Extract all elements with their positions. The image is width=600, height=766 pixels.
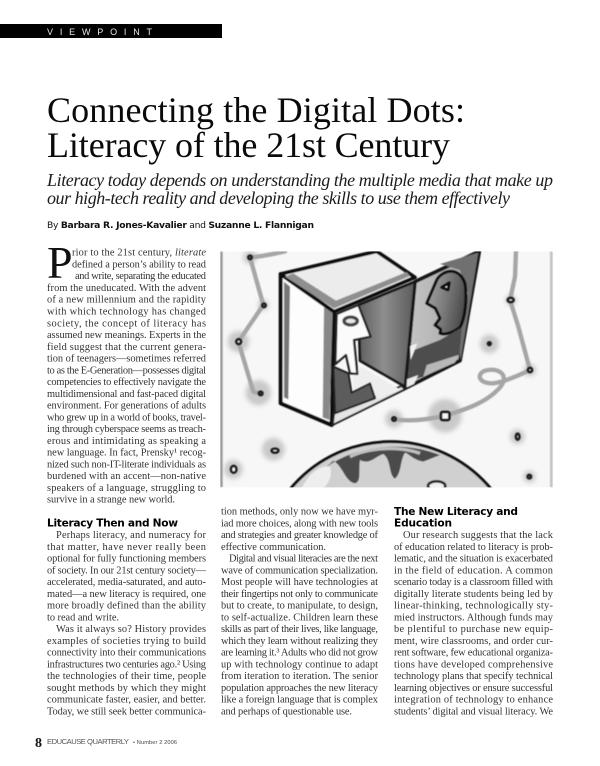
back wall — [358, 282, 415, 387]
illustration: two profiles in a box above a globe — [220, 251, 553, 488]
text block: column 3 body: be plentiful to purchase new equip- — [394, 624, 554, 635]
text block: column 2 body — [221, 506, 379, 717]
text block: column 1 body: communicate faster, easier, and better. — [47, 695, 206, 706]
text block: column 3 body: digitally literate students being led by — [394, 589, 554, 600]
right panel — [405, 251, 479, 388]
globe — [288, 439, 492, 488]
text block: intro with drop cap: burdened with an accent—non-native — [47, 471, 206, 482]
text block: column 1 body: Perhaps literacy, and numeracy for — [56, 530, 207, 541]
text block: intro with drop cap: and write, separating the educated — [75, 271, 207, 282]
byline: By Barbara R. Jones-Kavalier and Suzanne L. Flannigan — [47, 220, 314, 231]
title: Connecting the Digital Dots: — [47, 90, 465, 130]
text block: column 3 body: lematic, and the situation is exacerbated — [394, 554, 554, 564]
text block: intro with drop cap: rior to the 21st century, literate — [72, 248, 206, 259]
box left face — [281, 274, 334, 425]
text block: column 2 body: from iteration to iteration. The senior — [221, 671, 379, 682]
right figure body — [407, 327, 462, 382]
text block: column 1 body: infrastructures two centuries ago.² Using — [47, 659, 206, 670]
text block: column 1 body: of society. In our 21st century society— — [47, 565, 207, 576]
text block: column 1 body: optional for fully functioning members — [47, 554, 206, 564]
text block: column 2 body: wave of communication specialization. — [221, 565, 378, 576]
text block: column 3 body: tions have developed comprehensive — [394, 659, 553, 670]
text block: intro with drop cap: who grew up in a world of books, travel- — [47, 412, 207, 423]
text block: column 2 body: like a foreign language that is complex — [221, 695, 379, 706]
heading: The New Literacy and Education — [394, 506, 518, 530]
text block: column 1 body: sought methods by which they might — [47, 683, 206, 694]
title: Literacy of the 21st Century — [47, 125, 450, 165]
text block: column 3 body: in the field of education. A common — [394, 565, 554, 576]
text block: intro with drop cap: environment. For generations of adults — [47, 401, 206, 412]
text block: column 2 body: tion methods, only now we have myr- — [221, 506, 379, 518]
drop cap: P — [47, 237, 73, 288]
left figure body — [333, 367, 375, 413]
text block: column 1 body: that matter, have never really been — [47, 542, 207, 553]
text block: intro with drop cap: tion of teenagers—sometimes referred — [47, 354, 207, 364]
text block: column 3 body — [394, 530, 554, 717]
text block: column 1 body: Was it always so? History provides — [56, 624, 206, 635]
footer: page number and publication: • Number 2 2006 — [133, 740, 177, 746]
text block: column 2 body: up with technology continue to adapt — [221, 659, 378, 670]
text block: column 2 body: which they learn without realizing they — [221, 636, 379, 647]
text block: intro with drop cap: multidimensional and fast-paced digital — [47, 389, 206, 400]
text block: column 1 body: the technologies of their time, people — [47, 671, 206, 682]
text block: intro with drop cap: to as the E-Generation—possesses digital — [47, 365, 206, 376]
text block: column 2 body: population approaches the new literacy — [221, 683, 379, 694]
connector lines — [238, 251, 530, 420]
text block: column 1 body: connectivity into their communications — [47, 648, 206, 659]
title — [47, 90, 465, 165]
text block: column 1 body: mated—a new literacy is required, one — [47, 589, 206, 600]
text block: column 3 body: Our research suggests that the lack — [403, 530, 554, 541]
text block: column 2 body: effective communication. — [221, 542, 326, 553]
text block: intro with drop cap: defined a person’s ability to read — [72, 260, 207, 270]
heading: The New Literacy and Education: The New Literacy and — [394, 506, 518, 518]
text block: column 3 body: integration of technology to enhance — [394, 695, 553, 706]
text block: intro with drop cap: new language. In fact, Prensky¹ recog- — [47, 448, 207, 459]
text block: intro with drop cap: assumed new meanings. Experts in the — [47, 330, 206, 341]
text block: column 2 body: but to create, to manipulate, to design, — [221, 601, 378, 612]
text block: column 1 body — [47, 530, 207, 717]
text block: intro with drop cap: field suggest that the current genera- — [47, 342, 207, 353]
text block: column 2 body: to self-actualize. Children learn these — [221, 612, 378, 623]
text block: column 3 body: of education related to literacy is prob- — [394, 542, 554, 553]
text block: intro with drop cap: nized such non-IT-literate individuals as — [47, 459, 206, 470]
text block: intro with drop cap: survive in a strange new world. — [47, 495, 175, 506]
text block: column 2 body: iad more choices, along with new tools — [221, 518, 378, 529]
heading: Literacy Then and Now: Literacy Then and Now — [47, 518, 178, 530]
text block: intro with drop cap: ing through cyberspace seems as treach- — [47, 424, 207, 435]
right profile head — [427, 271, 466, 334]
text block: column 3 body: ment, wire classrooms, and order cur- — [394, 636, 554, 647]
text block: column 2 body: their fingertips not only to communicate — [221, 589, 378, 600]
heading: The New Literacy and Education: Education — [394, 518, 452, 530]
section banner: VIEWPOINT: VIEWPOINT — [47, 27, 152, 37]
text block: column 3 body: scenario today is a classroom filled with — [394, 577, 554, 588]
text block: column 3 body: mied instructors. Although funds may — [394, 612, 554, 623]
subtitle: our high-tech reality and developing the skills to use them effectively — [47, 188, 510, 208]
text block: intro with drop cap: from the uneducated. With the advent — [47, 283, 206, 294]
footer: page number and publication: 8 — [35, 736, 42, 751]
text block: column 3 body: rent software, few educational organiza- — [394, 648, 554, 659]
text block: intro with drop cap: erous and intimidating as speaking a — [47, 436, 206, 447]
text block: intro with drop cap: society, the concept of literacy has — [47, 318, 206, 329]
text block: intro with drop cap: competencies to effectively navigate the — [47, 377, 206, 388]
section banner: VIEWPOINT — [0, 24, 222, 38]
text block: column 2 body: are learning it.³ Adults who did not grow — [221, 648, 378, 659]
text block: column 3 body: linear-thinking, technologically sty- — [394, 601, 554, 612]
text block: column 1 body: Today, we still seek better communica- — [47, 706, 207, 717]
text block: column 3 body: technology plans that specify technical — [394, 671, 553, 682]
left profile face — [335, 305, 371, 374]
text block: column 3 body: learning objectives or ensure successful — [394, 683, 553, 694]
text block: intro with drop cap: of a new millennium and the rapidity — [47, 295, 207, 306]
text block: column 2 body: Most people will have technologies at — [221, 577, 378, 588]
text block: column 2 body: and strategies and greater knowledge of — [221, 530, 379, 541]
text block: column 3 body: students’ digital and visual literacy. We — [394, 706, 553, 717]
text block: column 1 body: to read and write. — [47, 612, 119, 623]
text block: column 1 body: accelerated, media-saturated, and auto- — [47, 577, 207, 588]
box top face — [281, 251, 415, 312]
subtitle: Literacy today depends on understanding the multiple media that make up — [46, 170, 553, 190]
subtitle — [46, 170, 553, 208]
text block: column 2 body: and perhaps of questionable use. — [221, 706, 352, 717]
text block: column 2 body: Digital and visual literacies are the next — [229, 554, 378, 564]
footer: page number and publication — [35, 736, 177, 751]
star nodes — [224, 251, 536, 483]
box: three-dimensional frame — [281, 251, 479, 425]
footer: page number and publication: EDUCAUSE QUARTERLY — [47, 737, 129, 746]
text block: column 1 body: more broadly defined than the ability — [47, 601, 207, 612]
text block: column 2 body: skills as part of their lives, like language, — [221, 624, 378, 635]
text block: column 1 body: examples of societies trying to build — [47, 636, 207, 647]
text block: intro with drop cap: with which technology has changed — [47, 306, 207, 318]
text block: intro with drop cap — [47, 237, 207, 506]
text block: intro with drop cap: speakers of a language, struggling to — [47, 483, 206, 494]
left figure base — [333, 386, 405, 425]
white floor — [353, 367, 401, 399]
